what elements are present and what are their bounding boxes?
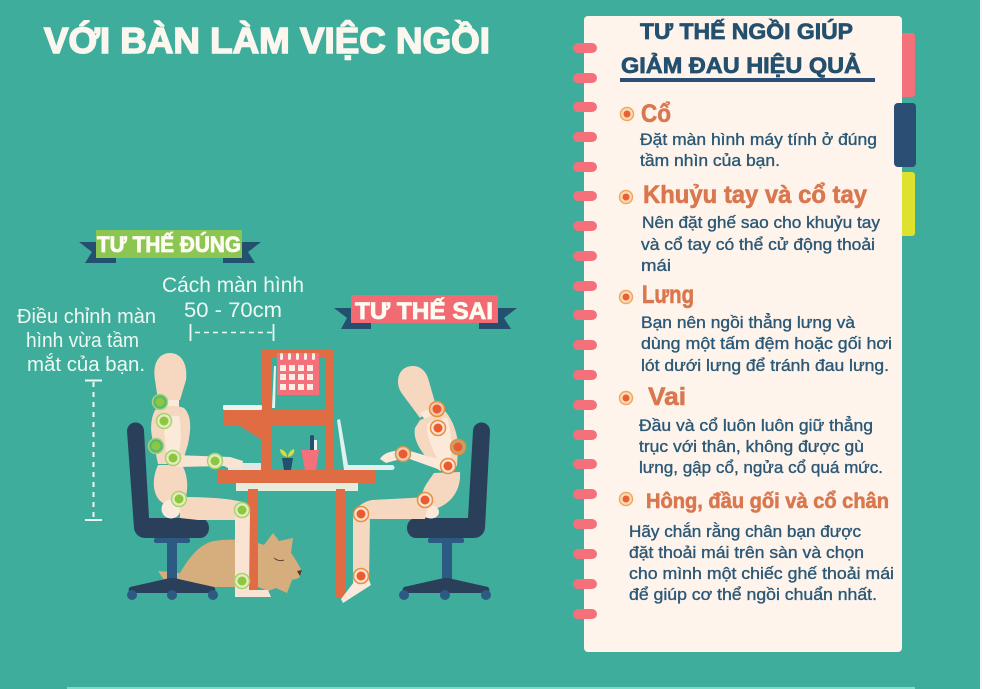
chair: right — [399, 422, 491, 600]
banner: correct posture: TƯ THẾ ĐÚNG — [97, 232, 241, 257]
left laptop — [223, 366, 276, 470]
joint markers: green — [148, 394, 250, 588]
figure: wrong posture — [341, 366, 466, 603]
label: adjust screen height: mắt của bạn. — [27, 353, 145, 376]
label: screen distance — [162, 274, 304, 341]
item: hips, knees and ankles: để giúp cơ thể ngồi chuẩn nhất. — [629, 586, 877, 604]
panel heading — [620, 19, 875, 82]
label: adjust screen height: hình vừa tầm — [26, 330, 139, 352]
item: hips, knees and ankles: Hãy chắn rằng chân bạn được — [629, 522, 861, 541]
desk hutch — [224, 349, 333, 471]
item: elbows and wrists — [620, 181, 881, 275]
item: neck — [620, 100, 877, 170]
panel: notebook — [573, 16, 916, 652]
item: shoulders — [620, 383, 883, 477]
item: hips, knees and ankles: cho mình một chiếc ghế thoải mái — [629, 565, 894, 583]
banner: wrong posture: TƯ THẾ SAI — [355, 297, 493, 325]
item: hips, knees and ankles — [620, 490, 894, 604]
label: screen distance: Cách màn hình — [162, 274, 304, 297]
notebook tabs — [894, 33, 916, 236]
item: neck: Cổ — [641, 100, 671, 128]
chair: left — [127, 422, 218, 600]
label: adjust screen height — [17, 306, 156, 520]
item: elbows and wrists: Nên đặt ghế sao cho khuỷu tay — [642, 214, 881, 232]
figure: correct posture — [148, 353, 271, 597]
item: back: Bạn nên ngồi thẳng lưng và — [641, 313, 856, 332]
item: back: Lưng — [642, 281, 694, 309]
item: shoulders: Vai — [648, 383, 686, 411]
item: elbows and wrists: Khuỷu tay và cổ tay — [643, 181, 867, 209]
panel heading: GIẢM ĐAU HIỆU QUẢ — [621, 53, 861, 78]
item: hips, knees and ankles: Hông, đầu gối và cổ chân — [646, 490, 889, 513]
notebook rings — [573, 43, 597, 619]
joint markers: red — [354, 402, 466, 584]
plant — [280, 449, 294, 470]
item: back: lót dưới lưng để tránh đau lưng. — [641, 357, 889, 375]
item: back — [620, 281, 892, 375]
item: shoulders: Đầu và cổ luôn luôn giữ thẳng — [639, 416, 873, 435]
icon: sleeping dog — [158, 533, 302, 593]
item: neck: Đặt màn hình máy tính ở đúng — [640, 131, 877, 149]
item: elbows and wrists: và cổ tay có thể cử động thoải — [641, 236, 875, 254]
item: hips, knees and ankles: đặt thoải mái trên sàn và chọn — [629, 544, 864, 562]
calendar — [277, 353, 319, 395]
banner: wrong posture — [334, 295, 517, 329]
item: shoulders: lưng, gập cổ, ngửa cổ quá mức. — [639, 459, 883, 477]
banner: correct posture — [79, 230, 261, 263]
right laptop — [337, 419, 394, 470]
item: neck: tầm nhìn của bạn. — [640, 152, 780, 170]
item: elbows and wrists: mái — [641, 257, 671, 275]
item: shoulders: trục với thân, không được gù — [639, 438, 864, 456]
pen cup — [301, 435, 319, 470]
item: back: dùng một tấm đệm hoặc gối hơi — [641, 335, 892, 353]
panel heading: TƯ THẾ NGỒI GIÚP — [640, 19, 853, 44]
label: adjust screen height: Điều chỉnh màn — [17, 306, 156, 328]
label: screen distance: 50 - 70cm — [184, 299, 282, 322]
title: VỚI BÀN LÀM VIỆC NGỒI — [44, 19, 490, 61]
desk — [218, 349, 375, 597]
